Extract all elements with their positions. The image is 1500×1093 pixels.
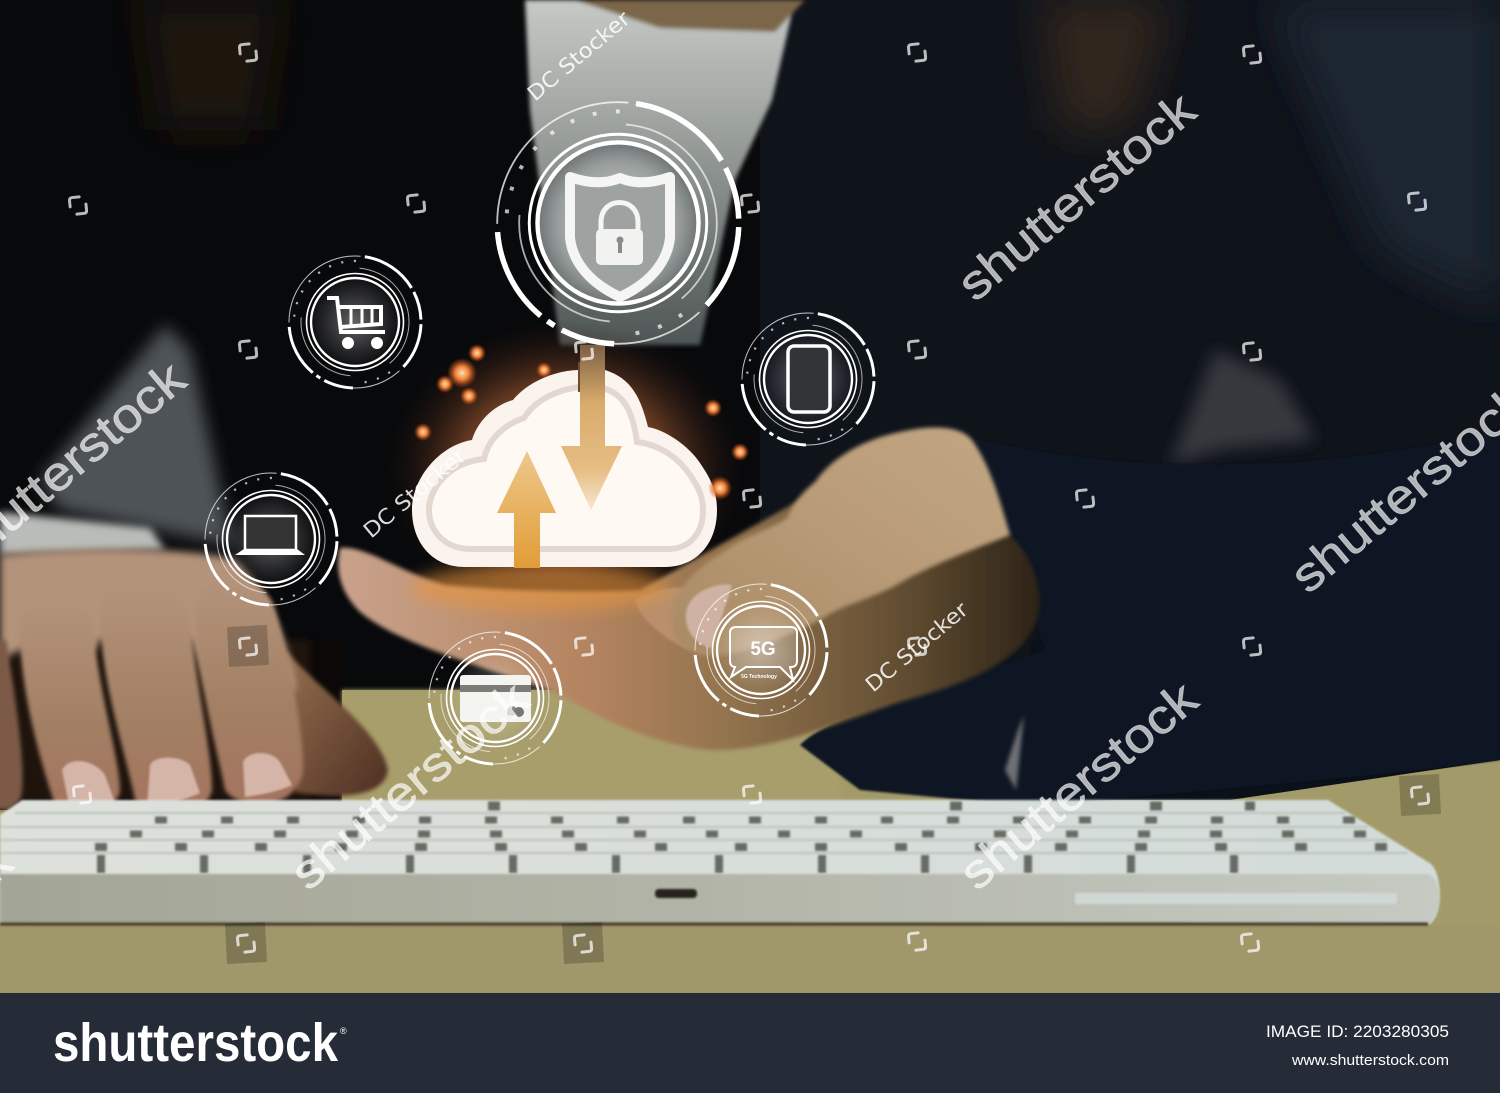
keyboard <box>0 800 1440 924</box>
thumbnail <box>686 584 732 648</box>
watermark: DC Stocker repeated <box>359 6 973 697</box>
padlock <box>601 202 638 232</box>
left hand <box>0 549 388 815</box>
back of hand <box>0 549 297 690</box>
gaps between fingers <box>0 640 310 800</box>
fingers <box>0 578 303 815</box>
desk <box>0 686 1500 993</box>
watermark: corner marks <box>69 43 1441 964</box>
icon: smartphone ring <box>740 312 876 446</box>
grey shirt patches <box>40 325 1315 545</box>
icon: shield security ring <box>494 100 742 346</box>
warm light on palm <box>410 564 670 612</box>
watermark: DC Stocker repeated: DC Stocker <box>523 6 635 106</box>
white shirt <box>525 0 805 345</box>
thumb and knuckle <box>672 427 1010 656</box>
jacket sleeve <box>800 430 1500 806</box>
watermark: shutterstock repeated: shutterstock <box>948 82 1207 311</box>
fingernails <box>61 752 292 802</box>
white cuff <box>0 512 165 555</box>
orange sparks <box>414 344 749 500</box>
thumb behind <box>285 650 388 796</box>
icon: credit card ring <box>428 631 562 766</box>
watermark: DC Stocker repeated: DC Stocker <box>861 597 973 697</box>
website: www.shutterstock.com <box>1291 1052 1449 1069</box>
arrow down <box>561 345 622 510</box>
palm and fingers <box>338 500 1040 750</box>
shutterstock logo: shutterstock <box>53 1013 339 1073</box>
cloud glow <box>402 331 729 590</box>
footer bar <box>0 993 1500 1093</box>
fingertip <box>636 587 685 648</box>
central hand <box>338 427 1040 750</box>
icon: 5G ring: 5G Technology <box>741 674 777 680</box>
image id: IMAGE ID: 2203280305 <box>1266 1022 1449 1041</box>
key gaps <box>0 806 1410 864</box>
top gap in cloud <box>578 362 580 392</box>
icon: laptop ring <box>204 472 338 606</box>
icon: 5G ring <box>694 583 828 718</box>
icon: 5G ring: 5G <box>750 639 776 660</box>
watermark: shutterstock repeated: shutterstock <box>950 671 1209 900</box>
arrow up <box>497 451 556 568</box>
watermark: shutterstock repeated: shutterstock <box>281 671 540 900</box>
cloud icon <box>412 345 717 568</box>
icon: shopping cart ring <box>288 255 422 390</box>
watermark: shutterstock repeated <box>0 95 1500 888</box>
watermark: DC Stocker repeated: DC Stocker <box>359 443 471 543</box>
registered mark: ® <box>340 1026 347 1036</box>
shield <box>570 177 670 297</box>
